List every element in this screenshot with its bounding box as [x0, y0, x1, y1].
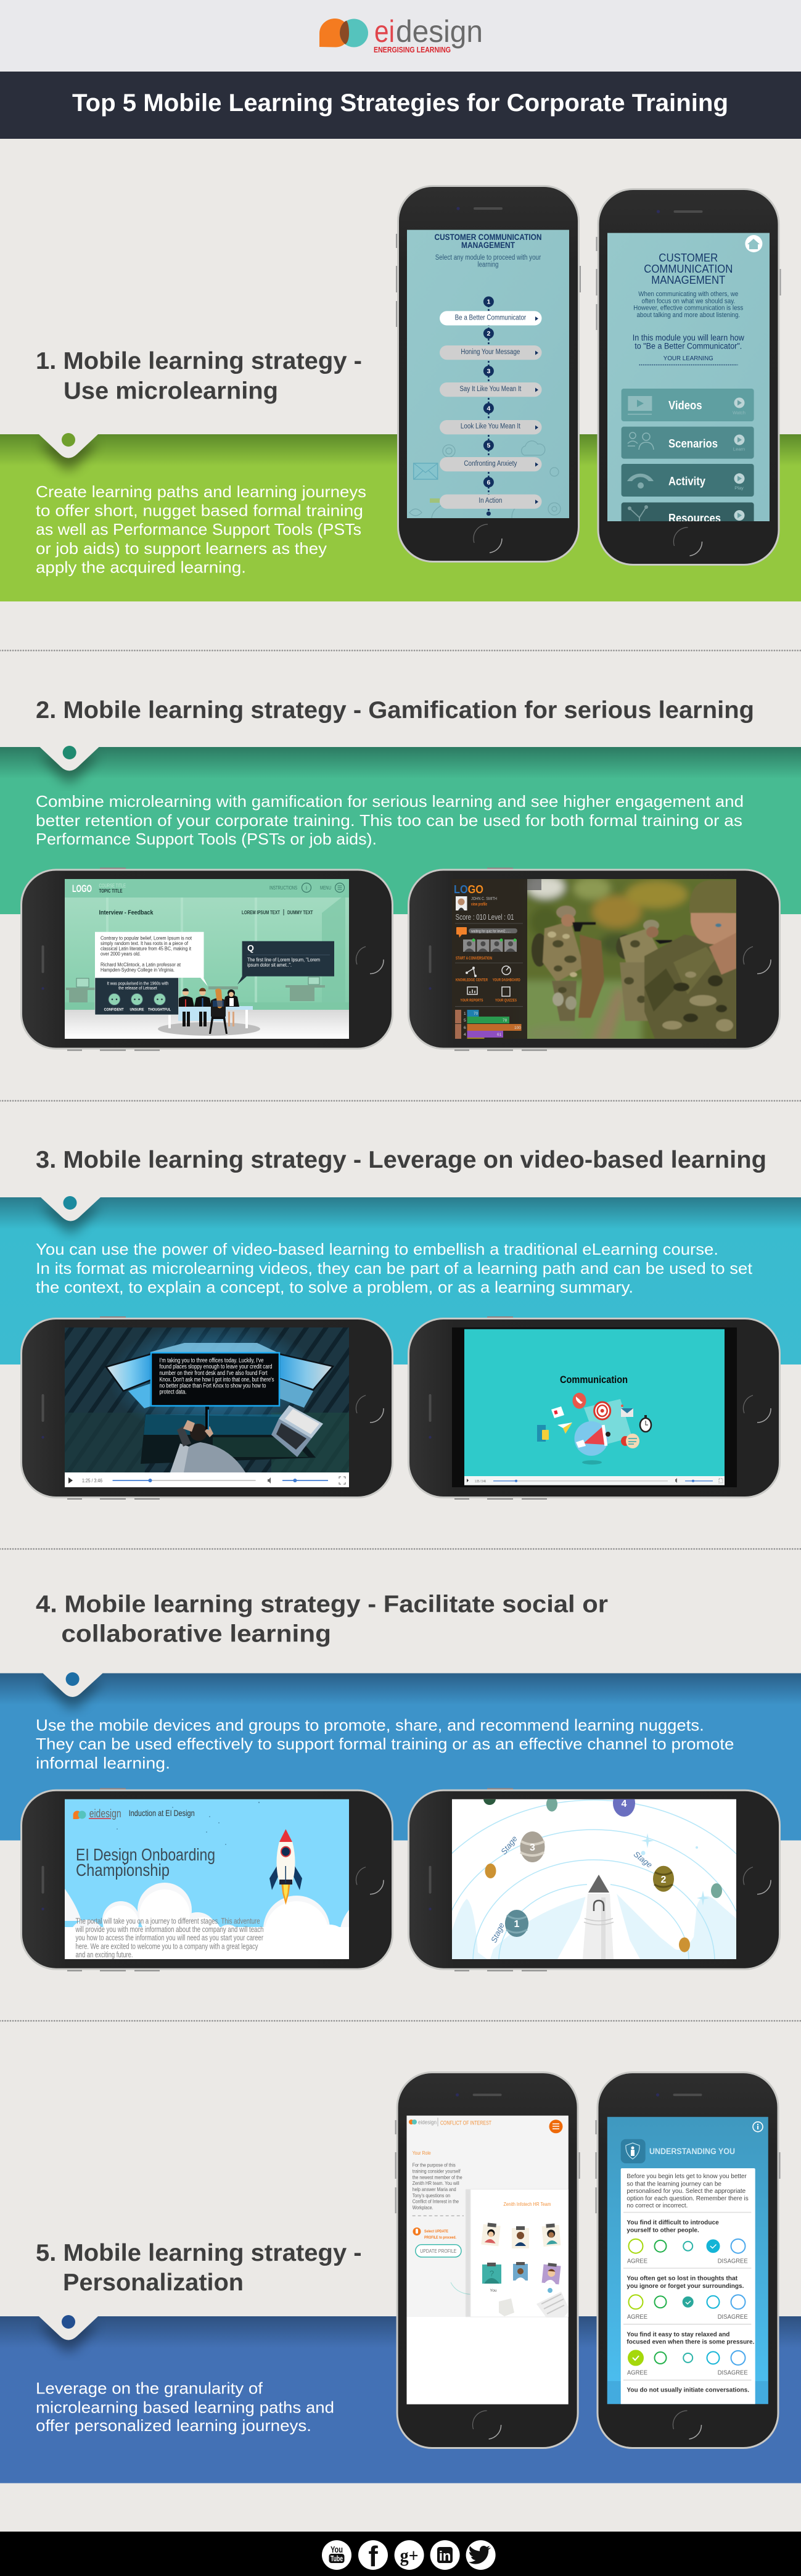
- screen: module overview: CUSTOMER: [659, 252, 718, 264]
- screen: team profile: eidesign: [418, 2120, 437, 2126]
- quiz card: AGREE: [627, 2257, 647, 2264]
- section 3 band: [0, 1196, 801, 1364]
- phone: understanding you quiz: [596, 2071, 781, 2449]
- section 5 body text: [36, 2379, 334, 2435]
- screen: module list: 1: [487, 299, 490, 306]
- screen: interview feedback: INSTRUCTIONS: [269, 885, 297, 891]
- screen: interview feedback: i: [306, 885, 307, 891]
- rating row 1: [629, 2239, 745, 2253]
- section 4 heading: collaborative learning: [61, 1620, 331, 1647]
- white speech box: Hampden-Sydney College in Virginia.: [101, 967, 175, 973]
- screen: onboarding: and an exciting future.: [75, 1950, 133, 1959]
- question box: [237, 941, 334, 985]
- video controls: [65, 1472, 349, 1487]
- screen: module overview: often focus on what we should say.: [641, 297, 735, 305]
- video controls: [464, 1476, 725, 1485]
- screen: module list: 6: [487, 479, 490, 486]
- white speech box: Contrary to popular belief, Lorem Ipsum is not: [101, 935, 192, 941]
- team panel: [470, 2189, 570, 2318]
- phone: hacker video: [20, 1316, 393, 1500]
- quiz card: DISAGREE: [718, 2257, 748, 2264]
- screen: soldiers game: view profile: [471, 902, 487, 907]
- section 1 band: [0, 433, 801, 601]
- dark feedback box: THOUGHTFUL: [148, 1008, 171, 1012]
- screen: stage map: 3: [530, 1843, 535, 1853]
- logo small: eidesign: [89, 1807, 121, 1820]
- rating row 3: [628, 2350, 745, 2365]
- section 5 band: [0, 2315, 801, 2483]
- quiz card: You do not usually initiate conversations.: [626, 2387, 749, 2394]
- icon: linkedin: in: [439, 2548, 451, 2564]
- screen: team profile: Select UPDATE: [424, 2229, 449, 2234]
- section 3 body text: the context, to explain a concept, to solve a problem, or as a learning summary.: [36, 1278, 633, 1297]
- screen: communication video: Communication: [560, 1374, 628, 1385]
- screen: module list: Honing Your Message: [461, 349, 520, 356]
- screen: understanding you: UNDERSTANDING YOU: [649, 2147, 735, 2156]
- icon: info: [753, 2122, 763, 2132]
- screen: onboarding: The portal will take you on a journey to different stages. This adventure: [75, 1916, 260, 1926]
- section 2 body text: Combine microlearning with gamification for serious learning and see higher engagement and: [36, 792, 744, 811]
- icon: google plus: g+: [400, 2545, 419, 2566]
- screen: module list: Look Like You Mean It: [461, 423, 521, 431]
- title: Top 5 Mobile Learning Strategies for Corporate Training: [72, 89, 728, 117]
- screen: module list: 3: [487, 368, 490, 375]
- screen: module list: 2: [487, 330, 490, 337]
- section 1 heading: [36, 348, 362, 405]
- screen: soldiers game: 61: [497, 1033, 502, 1037]
- phone: module overview: [596, 188, 781, 566]
- logo: eidesign: ei: [374, 14, 395, 49]
- icon: facebook: f: [368, 2540, 378, 2572]
- screen: soldiers game: 1: [464, 1012, 466, 1016]
- screen: team profile: Workplace.: [413, 2204, 433, 2210]
- logo: eidesign: design: [396, 14, 483, 49]
- video caption box: protect data.: [159, 1389, 186, 1395]
- section 3 heading: 3. Mobile learning strategy - Leverage on video-based learning: [36, 1147, 766, 1173]
- update profile button: [416, 2245, 461, 2257]
- section 3 body text: [36, 1240, 753, 1297]
- screen: module overview: However, effective communication is less: [633, 305, 744, 312]
- screen: team profile: Your Role: [413, 2150, 431, 2156]
- screen: team profile: [407, 2116, 569, 2405]
- section 5 heading: 5. Mobile learning strategy -: [36, 2240, 362, 2266]
- screen: module overview: Activity: [668, 475, 705, 489]
- team panel: You: [490, 2289, 497, 2293]
- screen: soldiers game: YOUR QUIZZES: [495, 998, 517, 1003]
- section 3 body text: In its format as microlearning videos, they can be part of a learning path and can be used to set: [36, 1259, 753, 1278]
- phone: learning path menu: [396, 185, 581, 563]
- quiz card: DISAGREE: [718, 2313, 748, 2321]
- screen: module overview: [607, 233, 770, 526]
- video caption box: I'm taking you to three offices today. Luckily, I've: [159, 1357, 264, 1364]
- photo: soldiers in forest: [518, 870, 746, 1049]
- icon: facebook: [358, 2540, 388, 2572]
- screen: onboarding: [65, 1799, 349, 1959]
- screen: module list: In Action: [479, 497, 502, 505]
- screen: interview feedback: LOREM IPSUM TEXT: [242, 910, 280, 915]
- divider: [0, 650, 801, 651]
- icon: youtube: You: [331, 2545, 343, 2555]
- screen: soldiers game: LOGO: [454, 883, 483, 896]
- interview panel figures: [168, 988, 253, 1034]
- screen: soldiers game: [454, 879, 736, 1039]
- phone: interview scenario: [20, 867, 393, 1051]
- screen: team profile: the newest member of the: [413, 2174, 462, 2180]
- section 1 body text: apply the acquired learning.: [36, 558, 246, 576]
- quiz card: DISAGREE: [718, 2369, 748, 2376]
- screen: team profile: Tony's questions on: [413, 2192, 450, 2198]
- screen: soldiers game: 6: [464, 1026, 466, 1030]
- quiz card: personalised for you. Select the appropriate: [626, 2187, 746, 2195]
- screen: module list: 5: [487, 442, 490, 450]
- screen: stage map: 4: [622, 1799, 627, 1809]
- question box: ipsum dolor sit amet..".: [247, 962, 292, 968]
- screen: soldiers game: 78: [503, 1018, 507, 1023]
- icon: home: [745, 235, 762, 252]
- screen: stage map: Stage: [632, 1849, 654, 1870]
- team panel: ?: [490, 2269, 494, 2278]
- quiz card: no correct or incorrect.: [626, 2202, 688, 2210]
- icon: youtube: Tube: [331, 2554, 343, 2563]
- logo: eidesign: [319, 14, 483, 54]
- screen: team profile: Conflict of Interest in the: [413, 2198, 459, 2205]
- screen: soldiers game: waiting for quiz for level2......: [470, 930, 511, 934]
- screen: module list: Select any module to proceed with your: [435, 254, 541, 262]
- section 1 heading: 1. Mobile learning strategy -: [36, 348, 362, 374]
- screen: module overview: Videos: [668, 400, 702, 412]
- screen: onboarding: Induction at EI Design: [129, 1808, 195, 1818]
- quiz card: you ignore or forget your surroundings.: [626, 2282, 744, 2290]
- section 1 body text: Create learning paths and learning journeys: [36, 482, 366, 501]
- divider: [0, 2020, 801, 2021]
- screen: module overview: MANAGEMENT: [651, 274, 725, 286]
- screen: soldiers game: 100: [514, 1026, 521, 1030]
- screen: onboarding: EI Design Onboarding: [76, 1845, 215, 1864]
- icon: shield badge: [621, 2139, 646, 2163]
- video caption box: no better place than Fort Knox to show you how to: [159, 1383, 266, 1389]
- section 5 heading: [36, 2240, 362, 2296]
- dark feedback box: CONFIDENT: [104, 1008, 124, 1012]
- phone: gamification dashboard: [408, 867, 781, 1051]
- section 4 body text: Use the mobile devices and groups to promote, share, and recommend learning nuggets.: [36, 1715, 704, 1734]
- screen: interview feedback: COURSE TITLE: [99, 883, 126, 888]
- screen: module overview: When communicating with others, we: [638, 291, 738, 298]
- quiz card: Before you begin lets get to know you better: [626, 2173, 747, 2180]
- phone: stage map: [403, 1788, 785, 2123]
- white speech box: simply random text. It has roots in a piece of: [101, 941, 189, 946]
- section 2 body text: Performance Support Tools (PSTs or job aids).: [36, 830, 377, 848]
- screen: module list: MANAGEMENT: [461, 241, 516, 250]
- title bar: [0, 72, 801, 139]
- screen: soldiers game: YOUR REPORTS: [460, 998, 483, 1003]
- section 3 body text: You can use the power of video-based learning to embellish a traditional eLearning course.: [36, 1240, 718, 1258]
- screen: team profile: help answer Maria and: [413, 2186, 456, 2192]
- screen: interview feedback: MENU: [320, 885, 331, 891]
- dark feedback box: [95, 978, 179, 1015]
- screen: soldiers game: YOUR DASHBOARD: [493, 978, 520, 982]
- section 5 body text: offer personalized learning journeys.: [36, 2416, 311, 2435]
- screen: module list: Say It Like You Mean It: [459, 386, 522, 393]
- icon: twitter: [466, 2540, 496, 2570]
- white speech box: [95, 932, 208, 986]
- figure: person at desk: [170, 1420, 245, 1472]
- screen: team profile: PROFILE to proceed.: [424, 2235, 456, 2240]
- screen: interview feedback: LOGO: [72, 883, 92, 894]
- screen: stage map: 2: [661, 1875, 667, 1885]
- video caption box: [151, 1353, 279, 1406]
- section 1 body text: [36, 482, 366, 576]
- dark feedback box: It was popularised in the 1960s with: [107, 981, 168, 986]
- icon: youtube: [322, 2540, 351, 2570]
- quiz card: [621, 2168, 755, 2406]
- icon: linkedin: [430, 2540, 460, 2570]
- screen: module overview: Scenarios: [668, 438, 718, 450]
- question box: The first line of Lorem Ipsum, "Lorem: [247, 957, 320, 962]
- screen: video player: [65, 1327, 349, 1487]
- quiz card: You often get so lost in thoughts that: [626, 2275, 738, 2282]
- screen: soldiers game: 5: [464, 1018, 466, 1023]
- icon: google plus: [395, 2540, 424, 2570]
- screen: interview feedback: Interview - Feedback: [99, 909, 154, 917]
- section 5 body text: microlearning based learning paths and: [36, 2398, 334, 2417]
- phone: onboarding championship: [20, 1788, 393, 1971]
- screen: module list: Be a Better Communicator: [455, 314, 526, 321]
- screen: module overview: Learn: [733, 447, 745, 452]
- section 4 body text: [36, 1715, 734, 1772]
- quiz card: focused even when there is some pressure.: [626, 2339, 754, 2346]
- section 2 body text: [36, 792, 744, 848]
- section 1 body text: to offer short, nugget based formal training: [36, 501, 363, 519]
- quiz card: yourself to other people.: [626, 2226, 699, 2234]
- update profile button: UPDATE PROFILE: [420, 2248, 456, 2254]
- screen: interview feedback: DUMMY TEXT: [287, 910, 313, 915]
- video caption box: Knox. Don't ask me how I got into that one, but there's: [159, 1377, 274, 1383]
- screen: module overview: about talking and more about listening.: [636, 312, 740, 319]
- section 4 band: [0, 1672, 801, 1841]
- rating row 2: [629, 2295, 745, 2309]
- screen: module overview: to "Be a Better Communicator".: [635, 342, 742, 350]
- screen: soldiers game: 4: [464, 1033, 466, 1037]
- white speech box: Richard McClintock, a Latin professor at: [101, 962, 181, 967]
- phone: conflict of interest role: [395, 2071, 580, 2449]
- screen: interview feedback: [65, 879, 349, 1039]
- clouds: [65, 1883, 349, 1962]
- screen: team profile: Zenith HR team. You will: [413, 2180, 459, 2186]
- rocket ship: [557, 1875, 640, 1959]
- screen: onboarding: Championship: [76, 1860, 170, 1880]
- section 2 body text: better retention of your corporate training. This too can be used for both formal training or as: [36, 811, 742, 830]
- screen: soldiers game: Score : 010 Level : 01: [456, 912, 514, 922]
- section 1 body text: as well as Performance Support Tools (PSTs: [36, 520, 361, 539]
- screen: module overview: In this module you will learn how: [633, 333, 744, 342]
- screen: module list: [407, 229, 569, 518]
- screen: understanding you: [607, 2117, 768, 2405]
- quiz card: AGREE: [627, 2313, 647, 2321]
- quiz card: so that the learning journey can be: [626, 2180, 721, 2187]
- screen: soldiers game: KNOWLEDGE CENTER: [456, 978, 488, 982]
- team panel: Zenith Infotech HR Team: [503, 2201, 551, 2207]
- screen: stage map: Stage: [489, 1922, 506, 1944]
- quiz card: option for each question. Remember there is: [626, 2195, 749, 2202]
- screen: module overview: COMMUNICATION: [644, 263, 733, 275]
- question box: Q: [247, 943, 254, 952]
- section 5 heading: Personalization: [63, 2269, 244, 2296]
- section 4 heading: [36, 1591, 608, 1647]
- screen: soldiers game: 70: [474, 1012, 479, 1016]
- screen: team profile: training consider yourself: [413, 2168, 461, 2174]
- video controls: 1:25 / 3:46: [82, 1477, 102, 1484]
- screen: module list: Confronting Anxiety: [464, 460, 517, 468]
- section 4 heading: 4. Mobile learning strategy - Facilitate social or: [36, 1591, 608, 1617]
- section 1 body text: or job aids) to support learners as they: [36, 539, 327, 558]
- screen: module overview: Resources: [668, 512, 721, 526]
- screen: stage map: 1: [514, 1919, 520, 1930]
- divider: [0, 1100, 801, 1102]
- section 1 heading: Use microlearning: [64, 378, 278, 405]
- section 2 band: [0, 746, 801, 914]
- screen: module list: learning: [477, 262, 498, 269]
- white speech box: over 2000 years old.: [101, 951, 141, 957]
- video caption box: found places sloppy enough to leave your credit card: [159, 1363, 273, 1371]
- section 2 heading: 2. Mobile learning strategy - Gamification for serious learning: [36, 697, 754, 724]
- screen: communication video: [452, 1327, 737, 1487]
- screen: team profile: CONFLICT OF INTEREST: [440, 2120, 491, 2126]
- screen: soldiers game: START A CONVERSATION: [456, 956, 492, 961]
- dark feedback box: UNSURE: [129, 1008, 144, 1012]
- screen: soldiers game: JOHN C. SMITH: [471, 897, 497, 901]
- screen: onboarding: you how to access the information you will need as you start your career: [75, 1933, 263, 1942]
- logo: eidesign: ENERGISING LEARNING: [374, 45, 451, 54]
- header background: [0, 0, 801, 72]
- screen: stage map: Stage: [499, 1834, 519, 1856]
- screen: onboarding: here. We are excited to welcome you to a company with a great legacy: [75, 1941, 258, 1951]
- video controls: 1:25 / 3:46: [475, 1480, 486, 1484]
- white speech box: classical Latin literature from 45 BC, making it: [101, 946, 192, 951]
- screen: team profile: For the purpose of this: [413, 2161, 456, 2168]
- planets: [483, 1790, 722, 1952]
- icon: communication cluster: [537, 1393, 651, 1464]
- screen: module overview: YOUR LEARNING: [663, 355, 713, 362]
- screen: stage map: [452, 1799, 736, 1959]
- screen: module list: CUSTOMER COMMUNICATION: [434, 233, 541, 242]
- screen: module overview: Play: [734, 485, 744, 491]
- logo small: [73, 1807, 121, 1820]
- icon: rocket: [269, 1829, 302, 1905]
- quiz card: You find it easy to stay relaxed and: [626, 2330, 729, 2338]
- section 5 body text: Leverage on the granularity of: [36, 2379, 263, 2397]
- divider: [0, 1548, 801, 1550]
- icon: menu button: [549, 2120, 562, 2133]
- screen: onboarding: will provide you with more information about the company and will teach: [75, 1925, 264, 1934]
- section 4 body text: They can be used effectively to support formal training or as an effective channel to promote: [36, 1735, 734, 1753]
- screen: module list: 4: [487, 405, 490, 412]
- section 4 body text: informal learning.: [36, 1754, 170, 1772]
- video caption box: number on their front desk and I've also found Fort: [159, 1370, 268, 1377]
- footer: [0, 2532, 801, 2576]
- quiz card: AGREE: [627, 2369, 647, 2376]
- dark feedback box: the release of Letraset: [118, 985, 157, 991]
- phone: communication video: [408, 1316, 781, 1500]
- screen: interview feedback: TOPIC TITLE: [99, 888, 123, 894]
- quiz card: You find it difficult to introduce: [626, 2219, 719, 2226]
- screen: module overview: Watch: [733, 410, 746, 416]
